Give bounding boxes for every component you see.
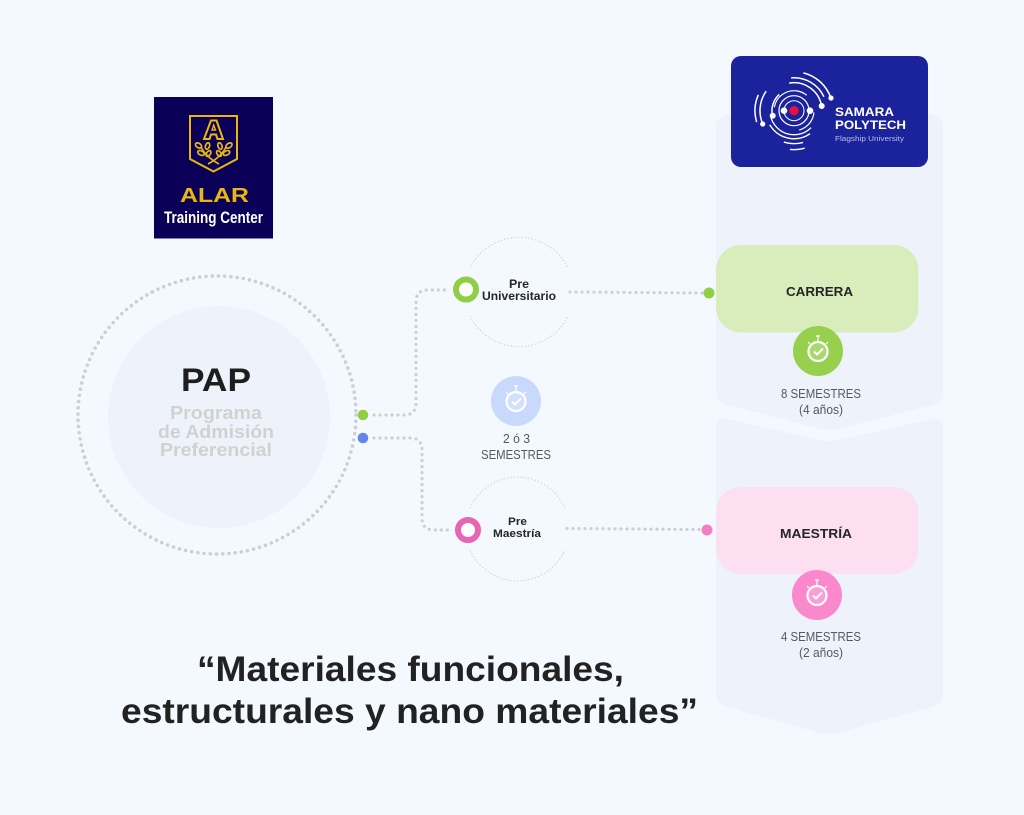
text: 4 semestres <box>781 630 861 660</box>
icon: nucleus and electrons <box>760 95 834 127</box>
connector: Pre Maestria to Maestria <box>567 528 702 530</box>
PAP circle <box>78 276 356 554</box>
node: Pre Universitario: Pre <box>509 279 529 291</box>
title: estructurales y nano materiales” <box>121 692 698 731</box>
node: Pre Universitario: Universitario <box>482 291 556 303</box>
title: “Materiales funcionales, <box>197 650 624 689</box>
title <box>121 650 698 731</box>
node: Pre Maestria: Maestría <box>493 528 542 540</box>
connector: PAP to Pre Maestria <box>374 438 450 530</box>
logo: ALAR Training Center: ALAR <box>180 185 250 207</box>
icon: pink stopwatch <box>792 570 842 620</box>
text: 8 semestres <box>781 387 861 417</box>
icon: orbits <box>745 62 843 159</box>
node: Pre Maestria <box>458 477 565 581</box>
dot: green start <box>358 410 368 420</box>
text: 8 semestres: 8 SEMESTRES <box>781 387 861 401</box>
text: 2 o 3 semestres <box>481 432 551 462</box>
logo: Samara Polytech: Flagship University <box>835 136 905 143</box>
logo: ALAR Training Center: Training Center <box>164 208 263 227</box>
dot: blue start <box>358 433 368 443</box>
card: maestria: MAESTRÍA <box>780 526 853 541</box>
dot: green end <box>704 288 714 298</box>
text: programa de admision preferencial: Programa <box>170 402 263 423</box>
card: carrera <box>716 245 918 332</box>
panel: carrera chevron <box>716 114 943 430</box>
heading: PAP: PAP <box>181 362 251 398</box>
connector: PAP to Pre Universitario <box>374 290 450 415</box>
icon: blue stopwatch <box>491 376 541 426</box>
text: 8 semestres: (4 años) <box>799 403 843 417</box>
text: 2 o 3 semestres: 2 ó 3 <box>503 432 530 446</box>
dot: pink end <box>702 524 712 536</box>
logo: Samara Polytech: SAMARA <box>835 107 894 119</box>
text: programa de admision preferencial: de Admisión <box>158 421 274 442</box>
icon: shield with laurel <box>190 116 237 172</box>
logo: Samara Polytech: POLYTECH <box>835 120 906 132</box>
icon: green stopwatch <box>793 326 843 376</box>
node: Pre Maestria: Pre <box>508 516 527 528</box>
card: maestria <box>716 487 918 574</box>
text: programa de admision preferencial <box>158 402 274 460</box>
logo: ALAR Training Center <box>154 97 273 238</box>
text: programa de admision preferencial: Preferencial <box>160 439 272 460</box>
text: 4 semestres: 4 SEMESTRES <box>781 630 861 644</box>
connector: Pre Universitario to Carrera <box>570 292 704 293</box>
logo: Samara Polytech <box>731 56 928 167</box>
node: Pre Universitario <box>456 237 568 347</box>
panel: maestria chevron <box>716 418 943 734</box>
text: 2 o 3 semestres: SEMESTRES <box>481 448 551 462</box>
text: 4 semestres: (2 años) <box>799 646 843 660</box>
card: carrera: CARRERA <box>786 284 854 299</box>
